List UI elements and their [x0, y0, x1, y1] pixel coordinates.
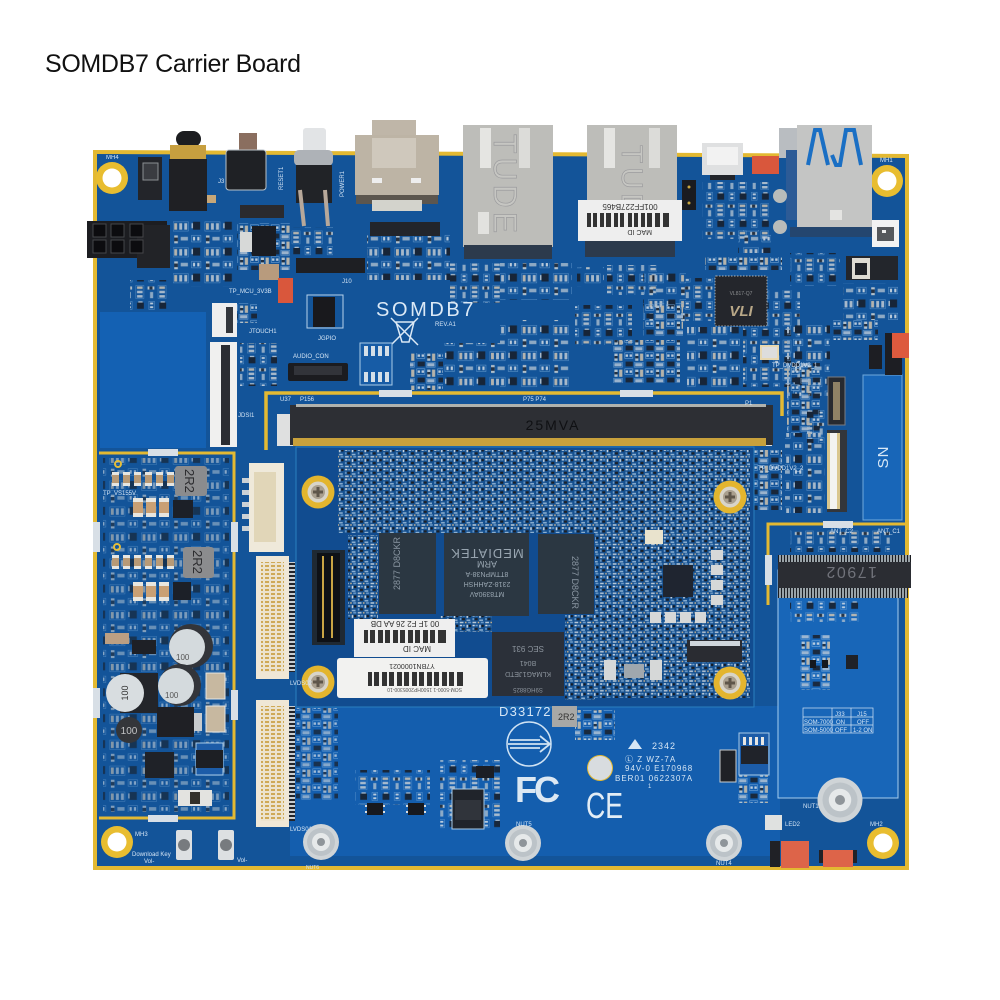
transistors Q5-Q8 [365, 803, 426, 815]
module screws [302, 476, 746, 700]
silkscreen labels: ANT_C2 [830, 529, 854, 535]
SN panel: SN [875, 446, 892, 468]
connector: HDMI [355, 120, 440, 236]
electrolytic capacitor C154 side [158, 664, 201, 706]
connector: J9 [138, 157, 162, 200]
part numbers and logos [499, 704, 693, 826]
silkscreen labels: TP_DVDD1V2_1 [772, 363, 818, 369]
connector: module FPC [687, 640, 742, 662]
jumper config table: OFF [835, 728, 847, 734]
serial label: module: SOM-5000-1 1500HP2005300-10 [387, 686, 462, 692]
MAC ID label: Ethernet [578, 200, 682, 241]
dense component fields [103, 182, 898, 830]
large capacitors row 1 [133, 498, 169, 517]
MAC ID label: module [354, 619, 455, 657]
inductor 100: 100 [121, 726, 138, 737]
M.2 socket: 17902 [825, 563, 877, 580]
jumper config table: OFF [857, 720, 869, 726]
testpoint marks [114, 461, 121, 550]
connector: J18 header [682, 180, 696, 210]
FPC connector: JDSI1: JDSI1 [238, 413, 255, 419]
SN panel [863, 375, 902, 520]
chip: eMMC: S9HG8825 [512, 686, 543, 692]
electrolytic capacitor C154 side: 100 [165, 691, 179, 700]
connector: audio jack J3: J3 [218, 179, 225, 185]
chip: eMMC [492, 632, 564, 696]
mounting holes [96, 162, 903, 859]
SOM module board [296, 447, 754, 707]
connector: LVDS 2 [256, 556, 313, 687]
UL code [615, 739, 693, 790]
MAC ID label: Ethernet: MAC ID [628, 228, 652, 235]
power section components [105, 461, 225, 806]
capacitor C283 [259, 264, 293, 303]
diode D7 [720, 750, 736, 782]
chip: VIA VLI hub [715, 276, 767, 326]
header JGPIO: JGPIO [318, 336, 336, 342]
large capacitors row 2 [133, 582, 169, 601]
silkscreen labels: P75 P74 [523, 397, 547, 403]
inductor 2R2 top: 2R2 [182, 469, 197, 493]
jumper config table: SOM-5000 [804, 728, 834, 734]
FPC connector: JTOUCH1 [212, 303, 277, 337]
MAC ID label: module: MAC ID [403, 644, 431, 653]
connector: FPC camera [827, 430, 847, 512]
chip U35 [452, 789, 484, 829]
chip Q9 [132, 640, 156, 654]
silkscreen: keys: Vol- [144, 859, 154, 865]
connector: LVDS 1: LVDS01 [290, 827, 313, 833]
button: power [294, 128, 346, 226]
SOMDB7 silkscreen: SOMDB7 [376, 299, 476, 321]
board edge [93, 150, 909, 870]
silkscreen labels: NUT6 [306, 865, 319, 871]
header J10 [296, 258, 365, 285]
connector: 6-pin power [87, 221, 170, 268]
chip U19 [145, 752, 174, 778]
button: reset: RESET1 [279, 166, 285, 190]
electrolytic capacitor left [106, 673, 158, 713]
jumper: red top [752, 156, 779, 174]
QR code sticker [872, 220, 899, 247]
UL code: 94V-0 E170968 [625, 764, 693, 773]
connector: LVDS 1 [256, 700, 313, 833]
jumper config table: J15 [857, 712, 867, 718]
nuts [303, 755, 862, 861]
serial label: module: Y7BN1000021 [389, 662, 435, 669]
button: power: POWER1 [340, 170, 346, 197]
large caps right [206, 673, 225, 732]
M.2 copper panel [778, 570, 898, 798]
UL code: 1 [648, 784, 652, 790]
connector: AUDIO_CON [288, 354, 348, 381]
silkscreen labels: ANT_C1 [877, 529, 901, 535]
crystal OSC [760, 345, 779, 360]
resistor R229 [178, 790, 212, 806]
M.2 chips [810, 655, 858, 669]
jumper config table: J33 [835, 712, 845, 718]
button SW2 [176, 830, 192, 860]
side buttons [132, 830, 247, 865]
connector: Ethernet 2: TUDE [615, 145, 648, 243]
inductor below module: 2R2 [558, 712, 575, 722]
connector: LVDS 2: LVDS02 [290, 681, 313, 687]
SOMDB7 silkscreen: REV.A1 [435, 322, 456, 328]
silkscreen labels: NUT4 [716, 861, 732, 867]
plain copper area: bottom [290, 706, 780, 856]
silkscreen labels: TP_VS155V [103, 491, 136, 497]
jumper: J19 [819, 850, 857, 867]
inductor 2R2 bottom [183, 547, 214, 578]
UL code: Ⓛ Z WZ-7A [625, 755, 676, 764]
jumper config table: ON [836, 720, 845, 726]
silkscreen: keys [132, 852, 247, 865]
silkscreen labels: TP_DVDD1V2_2 [758, 466, 804, 472]
connector: USB [773, 125, 875, 237]
inductor 2R2 top [175, 466, 207, 496]
regulator [240, 205, 284, 256]
MAC ID label: module: 00 1F F2 26 AA DB [371, 619, 439, 628]
M.2 socket [778, 555, 911, 598]
chip: MediaTek CPU: 2318-ZAHHSH [464, 580, 510, 587]
chip: MediaTek CPU: MT8390AV [469, 590, 504, 597]
FPC connector: JDSI1 [210, 342, 255, 447]
LED2 [765, 815, 801, 830]
connector: Ethernet 2 [585, 125, 677, 257]
small capacitor row 2 [112, 555, 174, 569]
jumper config table: SOM-7000 [804, 720, 834, 726]
FPC connector: JTOUCH1: JTOUCH1 [249, 329, 277, 335]
connector: AUDIO_CON: AUDIO_CON [293, 354, 329, 360]
silkscreen labels: NUT5 [516, 822, 532, 828]
module component texture [338, 450, 750, 700]
UL code: BER01 0622307A [615, 774, 693, 783]
header J33 [869, 345, 882, 369]
chip: MediaTek CPU: 8TTMPN38-A [465, 570, 508, 577]
title: SOMDB7 Carrier Board [45, 50, 301, 78]
electrolytic capacitor CE5: 100 [176, 653, 190, 662]
silkscreen labels: TP_MCU_3V3B [229, 289, 272, 295]
yellow outline: SO-DIMM section [266, 393, 782, 450]
board clips [93, 390, 853, 822]
regulator chip bottom [173, 582, 191, 600]
silkscreen labels: MH2 [870, 822, 883, 828]
inductor below module [552, 706, 577, 727]
carrier board [87, 120, 911, 871]
diode D9 [157, 707, 202, 737]
yellow outline: power section [99, 453, 234, 818]
D33172: D33172 [499, 704, 552, 719]
inductor 100 [116, 717, 142, 743]
SO-DIMM socket: 25MVA [526, 417, 580, 433]
yellow outline: M.2 section [768, 524, 905, 605]
jumper: J15 red [885, 333, 909, 375]
connector: Ethernet 1: TUDE [487, 134, 523, 237]
silkscreen: keys: Vol- [237, 858, 247, 864]
SO-DIMM socket [277, 404, 773, 446]
LED2: LED2 [785, 822, 801, 828]
chip: QFN [663, 565, 693, 597]
electrolytic capacitor left: 100 [120, 685, 130, 701]
capacitor CE6 [846, 256, 898, 280]
small capacitor row 1 [112, 472, 174, 486]
WEEE bin mark [391, 318, 418, 345]
regulator chip top [173, 500, 193, 518]
chip: VIA VLI hub: VLI [729, 303, 753, 320]
silkscreen labels: MH1 [880, 158, 893, 164]
silkscreen labels: P1 [745, 401, 753, 407]
FCC logo: FC [515, 769, 560, 810]
jumper config table: 1-2 ON [853, 728, 872, 734]
chip: eMMC: B041 [520, 659, 536, 666]
button: reset [226, 133, 285, 190]
connector: white wafer [242, 463, 284, 552]
UL code: 2342 [652, 741, 676, 751]
chip: VIA VLI hub: VL817-Q7 [730, 291, 753, 297]
chip U16 [739, 733, 769, 775]
chip U20 [196, 743, 223, 775]
chip: MediaTek CPU: ARM [477, 559, 497, 569]
chip: eMMC: KLMAG1JETD [505, 670, 551, 677]
MAC ID label: Ethernet: 001FF227B465 [602, 202, 658, 211]
connector: Ethernet 1 [463, 125, 553, 259]
button SW1 [218, 830, 234, 860]
header J10: J10 [342, 279, 352, 285]
connector: audio jack J3 [169, 131, 225, 211]
header JGPIO [307, 295, 343, 342]
silkscreen labels: NUT1 [803, 804, 819, 810]
silkscreen labels: MH4 [106, 155, 119, 161]
header J1 [312, 550, 345, 645]
silkscreen labels: MH3 [135, 832, 148, 838]
silkscreen: keys: Download Key [132, 852, 171, 858]
electrolytic capacitor CE5 [169, 624, 213, 668]
chip: MediaTek CPU [444, 533, 529, 616]
resistor block [105, 633, 129, 644]
board surface [97, 154, 905, 866]
CE logo: CE [586, 785, 623, 826]
jumper config table [803, 708, 873, 734]
chip U34 [476, 766, 494, 778]
plain copper area: left [100, 312, 206, 448]
silkscreen labels: P156 [300, 397, 315, 403]
silkscreen labels [103, 155, 901, 871]
inductor 2R2 bottom: 2R2 [190, 550, 205, 574]
chip: DRAM left [379, 533, 436, 614]
chip: DRAM left: 2877 D8CKR [392, 536, 402, 590]
chip: DRAM right [538, 534, 594, 614]
connector: micro USB [702, 143, 743, 180]
jumper: J4 [770, 841, 809, 868]
module passives [604, 530, 723, 680]
serial label: module [337, 658, 488, 698]
chip: eMMC: SEC 931 [511, 644, 544, 653]
chip: DRAM right: 2877 D8CKR [570, 556, 580, 610]
chip: MediaTek CPU: MEDIATEK [450, 546, 524, 561]
silkscreen labels: U37 [280, 397, 292, 403]
arrow logo [507, 722, 551, 766]
chip footprint U52 [360, 343, 392, 385]
connector: CSI1 [828, 377, 845, 425]
